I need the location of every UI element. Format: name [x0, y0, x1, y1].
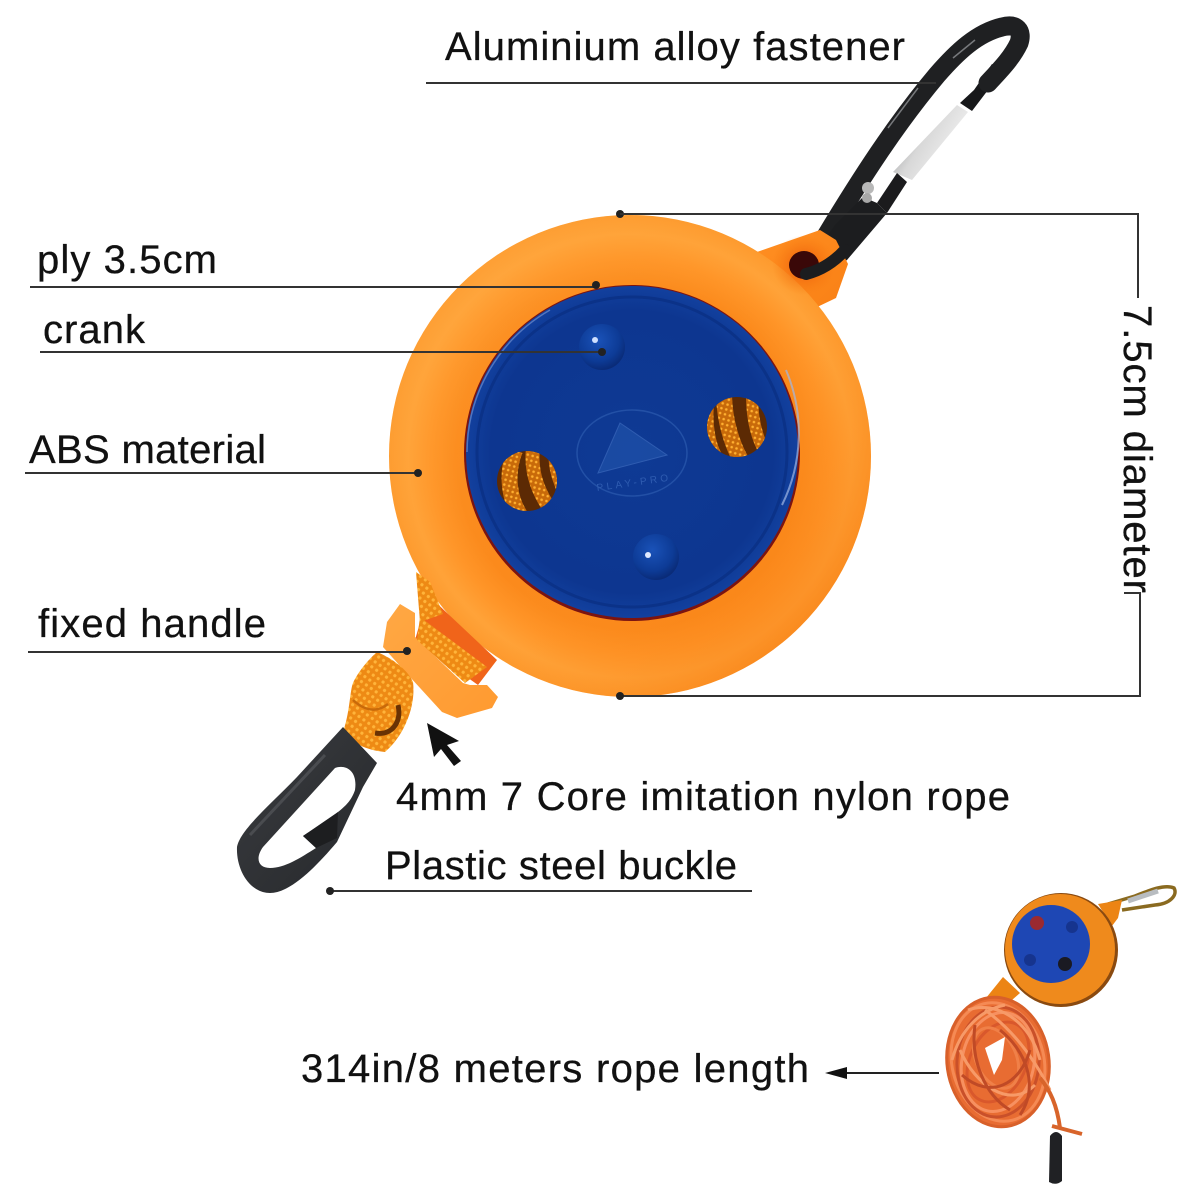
label: ply 3.5cm: ply 3.5cm [37, 238, 217, 282]
rope tail [1040, 1078, 1082, 1134]
orange case [389, 215, 871, 697]
label: ABS material [25, 428, 422, 477]
label: plastic steel buckle: Plastic steel buckle [385, 844, 737, 888]
tab shading [772, 235, 836, 295]
crank knob bottom [633, 534, 679, 580]
shadow against case [415, 595, 497, 685]
product: plastic steel buckle [237, 727, 377, 893]
rope window left [497, 451, 557, 511]
dimension: 7.5cm diameter: 7.5cm diameter [1115, 305, 1159, 593]
inset case [1004, 893, 1118, 1007]
inset: reel with coiled rope [938, 887, 1175, 1184]
nose highlights [888, 40, 975, 128]
inset blue disk [1012, 905, 1090, 983]
tab hole [789, 251, 819, 279]
gate sleeve top [960, 64, 1000, 111]
label: ABS material: ABS material [29, 428, 266, 472]
rope stub into case [416, 572, 443, 622]
label: crank: crank [43, 308, 146, 352]
inset handle [986, 977, 1020, 1000]
crank knob top [579, 324, 625, 370]
rope knot [344, 652, 413, 752]
label: fixed handle [28, 602, 411, 655]
coiled rope [938, 991, 1058, 1133]
inset tab [1098, 900, 1122, 926]
rope window right [707, 397, 767, 457]
embossed logo [577, 410, 687, 496]
coil opening [985, 1037, 1005, 1075]
label: rope length with arrow: 314in/8 meters rope length [301, 1047, 809, 1091]
dimension: 7.5cm diameter [616, 210, 1159, 700]
gate sleeve bottom [877, 173, 907, 213]
black pointer arrow [427, 723, 461, 766]
embossed logo: PLAY-PRO [596, 473, 669, 494]
gate bar [893, 105, 968, 180]
label: ply 3.5cm [30, 238, 600, 289]
spine and nose [826, 26, 1020, 236]
lower hook [793, 197, 887, 277]
rope band front [417, 617, 487, 683]
label: rope type: 4mm 7 Core imitation nylon rope [396, 775, 1010, 819]
label: aluminium alloy fastener: Aluminium alloy fastener [445, 25, 905, 69]
screw [862, 182, 874, 194]
fixed handle [383, 604, 498, 718]
label: crank [40, 308, 606, 356]
hanging tab [757, 230, 848, 320]
inset carabiner [1108, 887, 1175, 910]
product: rope, fixed handle, knot [344, 572, 498, 752]
product: carabiner fastener [793, 26, 1020, 277]
blue disk [464, 285, 800, 621]
inset buckle [1049, 1132, 1062, 1184]
label: fixed handle: fixed handle [38, 602, 266, 646]
product: reel body [389, 215, 871, 697]
